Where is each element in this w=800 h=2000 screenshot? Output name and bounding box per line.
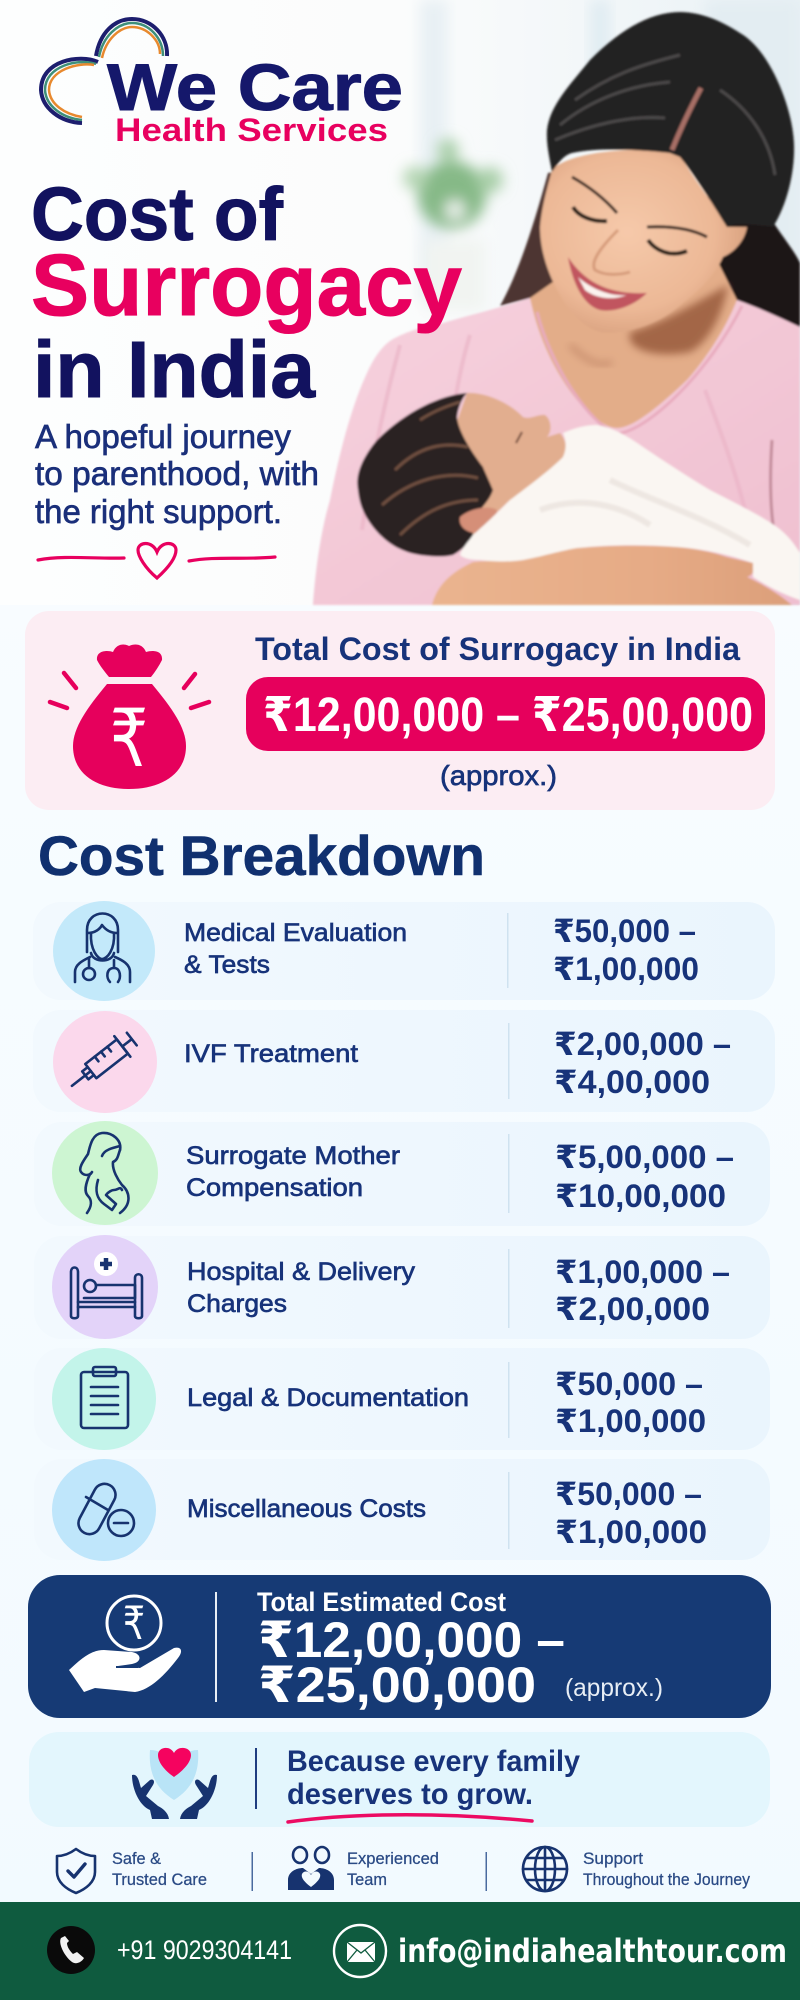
icon: shield — [57, 1849, 95, 1893]
title: Cost of — [31, 172, 284, 256]
row: IVF treatment: ₹4,00,000 — [554, 1064, 710, 1100]
trust badge: safe: Trusted Care — [112, 1870, 207, 1889]
trust badge: support: Throughout the Journey — [583, 1870, 750, 1889]
forearm — [432, 546, 792, 605]
panel: total estimated cost — [28, 1575, 771, 1718]
title: in India — [33, 325, 316, 414]
blanket — [460, 425, 800, 600]
banner text: Because every family — [287, 1745, 580, 1778]
panel: total estimated cost: ₹25,00,000 — [258, 1657, 536, 1713]
back hair right — [690, 190, 800, 332]
banner text: deserves to grow. — [287, 1778, 533, 1811]
footer — [0, 1902, 800, 2000]
icon: team — [288, 1847, 334, 1890]
price pill: ₹12,00,000 – ₹25,00,000 — [263, 689, 753, 742]
baby eye — [516, 432, 522, 443]
row: hospital and delivery: Charges — [187, 1290, 287, 1318]
icon: phone — [47, 1926, 95, 1974]
tagline: to parenthood, with — [35, 455, 319, 492]
row: hospital and delivery: ₹2,00,000 — [555, 1291, 710, 1327]
row: IVF treatment: IVF Treatment — [184, 1040, 358, 1068]
icon: syringe — [64, 1029, 140, 1096]
icon: money bag — [50, 644, 209, 789]
baby hair streaks — [382, 402, 478, 535]
panel title: Total Cost of Surrogacy in India — [255, 631, 740, 667]
row: hospital and delivery: Hospital & Delivery — [187, 1258, 416, 1286]
brows and eyes — [572, 177, 617, 213]
row: surrogate mother: Surrogate Mother — [186, 1142, 400, 1170]
icon: money bag: ₹ — [110, 694, 148, 783]
trust badge: safe — [57, 1849, 207, 1893]
pink underline — [288, 1815, 532, 1822]
row: miscellaneous costs: ₹50,000 – — [555, 1476, 702, 1512]
baby ear — [460, 508, 497, 533]
plant — [403, 139, 503, 310]
nose shading — [594, 230, 630, 274]
logo — [41, 19, 403, 148]
icon: coin in hand: ₹ — [123, 1597, 145, 1649]
phone number: +91 9029304141 — [117, 1935, 292, 1965]
row: miscellaneous costs — [34, 1459, 770, 1561]
row: IVF treatment: ₹2,00,000 – — [554, 1026, 731, 1062]
panel: total estimated cost: (approx.) — [565, 1674, 663, 1702]
row: medical evaluation: ₹1,00,000 — [553, 951, 699, 987]
back hair left — [500, 170, 565, 306]
total text: Total Estimated Cost — [257, 1587, 506, 1617]
icon: pregnant woman — [80, 1133, 128, 1213]
trust badge: safe: Safe & — [112, 1849, 162, 1868]
row: miscellaneous costs: ₹1,00,000 — [555, 1514, 707, 1550]
row: legal and documentation: Legal & Documentation — [187, 1384, 469, 1412]
panel: family banner — [29, 1732, 770, 1827]
trust badge: team: Experienced — [347, 1849, 439, 1868]
top hair — [547, 12, 794, 227]
row: medical evaluation: & Tests — [184, 951, 270, 979]
price pill — [246, 677, 765, 751]
panel: hero — [0, 0, 800, 605]
icon: coin in hand — [69, 1596, 181, 1692]
row: medical evaluation: Medical Evaluation — [184, 919, 407, 947]
icon: email — [334, 1925, 386, 1977]
icon: doctor — [75, 914, 130, 982]
row: surrogate mother — [34, 1121, 770, 1226]
row: hospital and delivery: ₹1,00,000 – — [555, 1254, 730, 1290]
We Care: We Care — [107, 50, 403, 124]
hair highlights — [555, 55, 775, 175]
trust badge: support: Support — [583, 1849, 643, 1868]
panel: total estimated cost: ₹12,00,000 – — [258, 1612, 565, 1668]
hair parting — [672, 88, 701, 150]
row: IVF treatment — [33, 1010, 775, 1113]
row: legal and documentation: ₹1,00,000 — [555, 1403, 706, 1439]
row: legal and documentation: ₹50,000 – — [555, 1366, 703, 1402]
row: surrogate mother: Compensation — [186, 1174, 363, 1202]
row: surrogate mother: ₹5,00,000 – — [555, 1139, 734, 1175]
photo: mother and baby — [313, 12, 800, 605]
heart arcs — [41, 19, 167, 123]
baby head — [440, 393, 566, 535]
smile — [568, 257, 647, 311]
row: miscellaneous costs: Miscellaneous Costs — [187, 1495, 426, 1523]
Health Services: Health Services — [115, 112, 388, 148]
icon: hospital bed — [71, 1252, 142, 1318]
tagline: A hopeful journey — [35, 418, 291, 455]
baby hair — [357, 393, 493, 556]
tagline — [35, 418, 319, 530]
icon: clipboard — [81, 1367, 128, 1428]
title — [31, 172, 462, 414]
sweater collar — [537, 306, 742, 434]
tagline: the right support. — [35, 493, 282, 530]
trust badge: team: Team — [347, 1870, 387, 1889]
icon: globe — [523, 1847, 567, 1891]
neck and chest — [530, 250, 737, 428]
trust badge: support — [523, 1847, 750, 1891]
row: medical evaluation: ₹50,000 – — [553, 913, 696, 949]
banner text — [287, 1745, 580, 1811]
sweater — [313, 298, 800, 605]
face — [540, 150, 747, 333]
approx note: (approx.) — [440, 760, 557, 791]
icon: pills — [75, 1480, 134, 1538]
neck shadow — [630, 285, 728, 354]
heading: cost breakdown: Cost Breakdown — [38, 824, 485, 887]
title: Surrogacy — [31, 237, 462, 334]
icon: hands and heart — [132, 1748, 217, 1819]
row: medical evaluation — [33, 901, 775, 1001]
trust badge: team — [288, 1847, 439, 1890]
row: surrogate mother: ₹10,00,000 — [555, 1178, 726, 1214]
row: legal and documentation — [34, 1348, 770, 1450]
heart divider — [38, 544, 275, 578]
panel: total cost — [25, 611, 775, 810]
row: hospital and delivery — [34, 1235, 770, 1339]
